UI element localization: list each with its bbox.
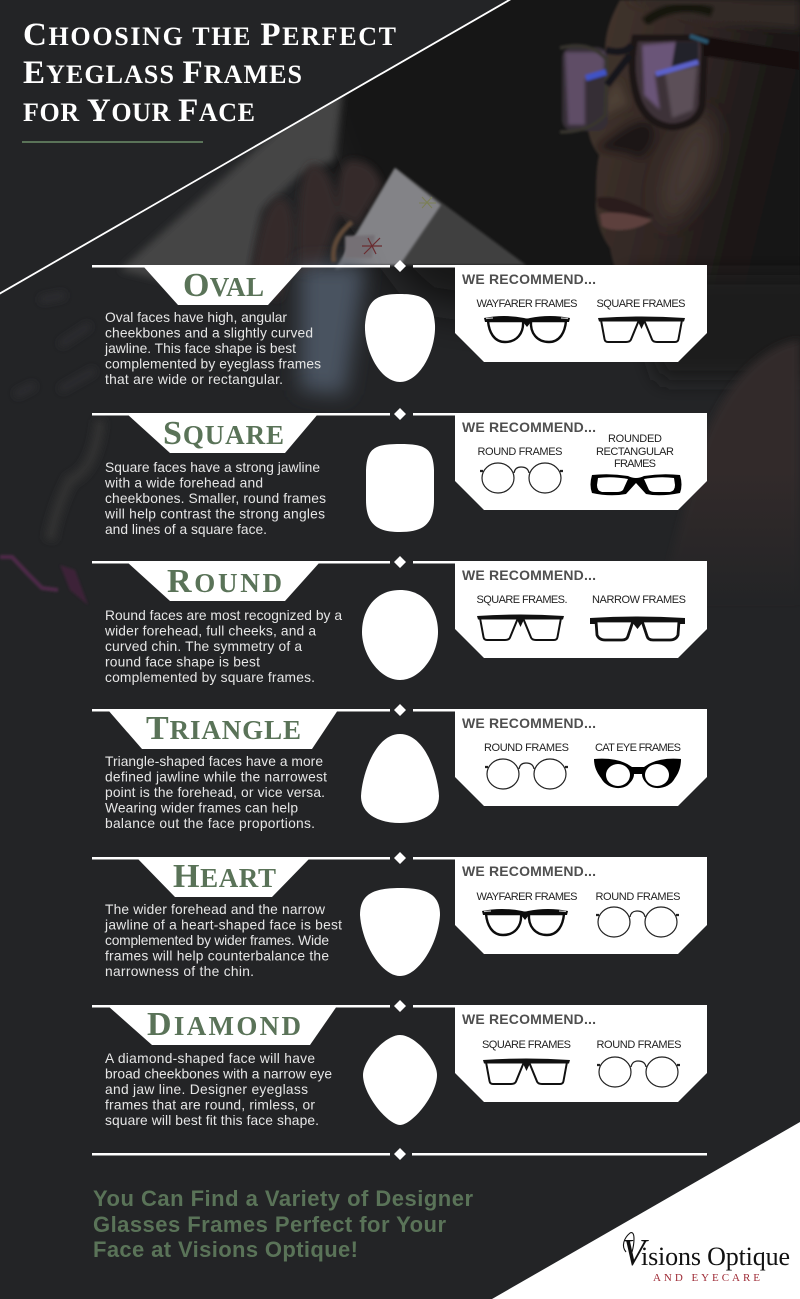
square recommendation panel: WE RECOMMEND... [462, 419, 596, 435]
heart description: jawline of a heart-shaped face is best [104, 918, 342, 932]
right lens in photo [632, 38, 704, 127]
heart description: The wider forehead and the narrow [105, 902, 325, 917]
header dark triangle [0, 0, 510, 293]
section: triangle [92, 704, 707, 831]
closing call to action: Glasses Frames Perfect for Your [93, 1212, 446, 1237]
triangle recommendation panel: WE RECOMMEND... [462, 715, 596, 731]
darken towards page bottom [0, 470, 800, 605]
divider rule [92, 556, 455, 568]
oval heading: OVAL [183, 267, 264, 304]
closing call to action: You Can Find a Variety of Designer [93, 1186, 473, 1211]
round recommendation panel: NARROW FRAMES [592, 594, 686, 606]
diamond recommendation panel: SQUARE FRAMES [482, 1039, 571, 1051]
heart heading: HEART [173, 858, 276, 895]
round recommendation panel: SQUARE FRAMES. [476, 594, 568, 606]
round heading: ROUND [167, 563, 282, 600]
heart description: frames will help counterbalance the [105, 948, 329, 964]
coffee mug [300, 168, 526, 395]
round face shape [362, 590, 438, 680]
divider rule [92, 408, 455, 420]
heart description: complemented by wider frames. Wide [105, 933, 329, 948]
triangle recommendation panel: ROUND FRAMES [484, 742, 569, 754]
jacket shoulder [660, 340, 800, 600]
square recommendation panel: FRAMES [614, 458, 656, 470]
fingers holding the mug [250, 160, 382, 300]
heart recommendation panel: ROUND FRAMES [596, 891, 680, 903]
square description: will help contrast the strong angles [104, 506, 325, 522]
oval recommendation panel: WE RECOMMEND... [462, 271, 596, 287]
oval description: that are wide or rectangular. [105, 372, 283, 387]
square recommendation panel: ROUND FRAMES [478, 446, 562, 458]
square recommendation panel [455, 413, 707, 510]
face [560, 0, 800, 300]
square description: cheekbones. Smaller, round frames [105, 491, 326, 506]
diamond description [105, 1051, 332, 1128]
oval recommendation panel: WAYFARER FRAMES [476, 298, 578, 310]
heart recommendation panel: WE RECOMMEND... [462, 863, 596, 879]
diamond face shape [363, 1035, 437, 1125]
title [23, 17, 396, 129]
square description: with a wide forehead and [104, 476, 263, 490]
round description: Round faces are most recognized by a [105, 608, 342, 623]
diamond heading: DIAMOND [147, 1006, 301, 1043]
diamond recommendation panel: WE RECOMMEND... [462, 1011, 596, 1027]
left side blurred streaks [15, 295, 100, 540]
triangle recommendation panel [455, 709, 707, 806]
diagonal line [0, 0, 511, 294]
section: diamond [92, 1000, 707, 1128]
title: EYEGLASS FRAMES [23, 55, 302, 91]
round description: round face shape is best [105, 654, 260, 670]
closing divider [92, 1148, 707, 1160]
heart description [104, 902, 342, 979]
round ribbon [127, 562, 320, 601]
title: CHOOSING THE PERFECT [23, 17, 396, 53]
logo: Visions Optique and Eyecare: V [622, 1232, 649, 1274]
oval recommendation panel [455, 265, 707, 362]
square heading: SQUARE [163, 415, 284, 452]
divider rule [92, 852, 455, 864]
section: square [92, 408, 707, 537]
square recommendation panel: RECTANGULAR [596, 446, 674, 458]
logo: Visions Optique and Eyecare [622, 1232, 790, 1284]
title underline [22, 141, 203, 143]
square recommendation panel: ROUNDED [608, 433, 662, 445]
square description [104, 460, 326, 537]
oval description: cheekbones and a slightly curved [105, 326, 313, 340]
oval ribbon [143, 266, 303, 305]
back wall [120, 70, 345, 300]
logo: Visions Optique and Eyecare: isions Optique [641, 1242, 790, 1271]
oval description [104, 310, 321, 387]
white corner triangle [492, 1122, 800, 1299]
divider rule [92, 704, 455, 716]
triangle ribbon [108, 710, 338, 749]
triangle description: defined jawline while the narrowest [105, 770, 327, 784]
diamond description: A diamond-shaped face will have [105, 1051, 315, 1066]
diamond description: broad cheekbones with a narrow eye [105, 1066, 332, 1082]
divider rule [92, 260, 455, 272]
shadow below the jaw [625, 275, 800, 380]
triangle face shape [361, 734, 439, 823]
heart face shape [360, 888, 440, 976]
oval face shape [365, 294, 435, 382]
triangle description [105, 754, 327, 831]
oval description: Oval faces have high, angular [105, 310, 287, 325]
dark upper backdrop [250, 0, 800, 320]
round description: complemented by square frames. [105, 670, 315, 685]
section: heart [92, 852, 707, 979]
diamond description: frames that are round, rimless, or [105, 1098, 315, 1112]
section: round [92, 556, 707, 685]
square description: Square faces have a strong jawline [105, 460, 320, 475]
heart description: narrowness of the chin. [105, 964, 254, 979]
round description: curved chin. The symmetry of a [105, 639, 302, 654]
round recommendation panel [455, 561, 707, 658]
square description: and lines of a square face. [105, 522, 267, 537]
left lens in photo [562, 47, 608, 131]
diamond description: square will best fit this face shape. [105, 1113, 319, 1128]
round recommendation panel: WE RECOMMEND... [462, 567, 596, 583]
closing call to action [93, 1186, 473, 1262]
triangle heading: TRIANGLE [146, 710, 301, 747]
oval recommendation panel: SQUARE FRAMES [596, 298, 686, 310]
diamond recommendation panel [455, 1005, 707, 1102]
title: FOR YOUR FACE [23, 93, 255, 129]
heart ribbon [137, 858, 310, 897]
heart recommendation panel: WAYFARER FRAMES [476, 891, 578, 903]
oval description: jawline. This face shape is best [104, 341, 296, 356]
triangle description: balance out the face proportions. [105, 816, 315, 831]
square face shape [366, 444, 434, 532]
triangle description: Wearing wider frames can help [105, 800, 298, 816]
diamond recommendation panel: ROUND FRAMES [596, 1039, 682, 1051]
section: oval [92, 260, 707, 387]
left side pink fabric streak [0, 557, 88, 605]
oval description: complemented by eyeglass frames [105, 356, 321, 372]
round description [104, 608, 342, 685]
triangle description: Triangle-shaped faces have a more [105, 754, 323, 769]
divider rule [92, 1000, 455, 1012]
round description: wider forehead, full cheeks, and a [104, 624, 316, 638]
heart recommendation panel [455, 857, 707, 954]
diamond description: and jaw line. Designer eyeglass [105, 1082, 308, 1097]
closing call to action: Face at Visions Optique! [93, 1237, 358, 1262]
triangle description: point is the forehead, or vice versa. [105, 785, 325, 800]
diamond ribbon [108, 1006, 337, 1045]
square ribbon [127, 414, 318, 453]
triangle recommendation panel: CAT EYE FRAMES [595, 742, 681, 754]
background photo: person with glasses drinking from a mug [0, 0, 800, 605]
logo: Visions Optique and Eyecare: AND EYECARE [653, 1272, 760, 1284]
